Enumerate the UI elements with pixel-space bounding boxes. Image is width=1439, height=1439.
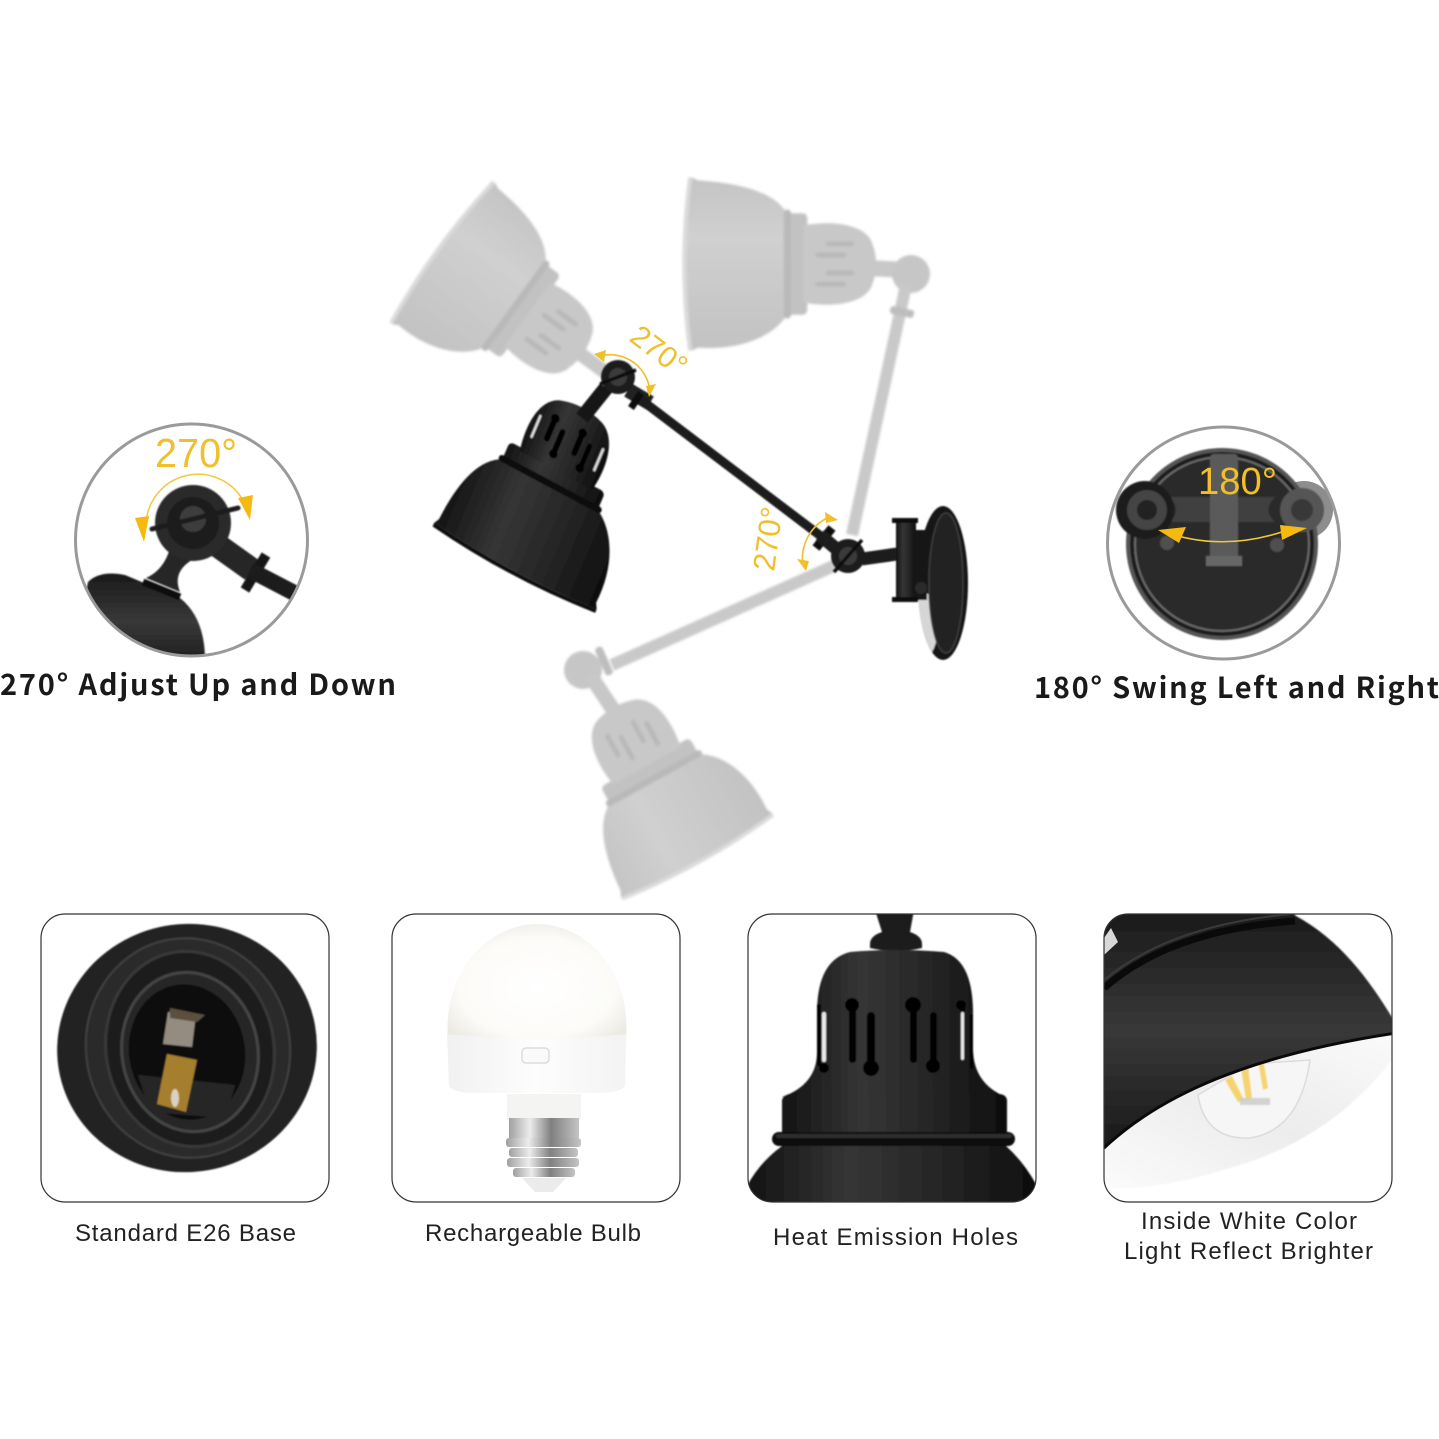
- caption: inside white color: Light Reflect Brighter: [1124, 1238, 1373, 1265]
- card: heat emission holes: [747, 910, 1037, 1204]
- card: inside white color: [1100, 910, 1396, 1202]
- rotation callout: 270 degrees at lower joint: [746, 505, 838, 573]
- socket bell: [782, 950, 1006, 1097]
- detail circle: up and down adjustment: [70, 424, 308, 670]
- shade rim: [1104, 1033, 1396, 1148]
- screw base: [506, 1118, 581, 1192]
- black dome exterior: [1100, 910, 1396, 1152]
- heading: 270 adjust: 270° Adjust Up and Down: [0, 662, 396, 704]
- wall mount: [862, 506, 968, 660]
- brass contact: [157, 1054, 197, 1112]
- wall plate back: [1116, 448, 1324, 640]
- lower joint: [831, 539, 865, 573]
- filaments: [1225, 1058, 1270, 1105]
- bulb band: [447, 1034, 626, 1093]
- joint disc: [155, 485, 231, 561]
- ghost swing end: [1275, 481, 1333, 539]
- arm: [582, 388, 840, 552]
- silver contact: [163, 1012, 196, 1047]
- shade: [747, 1146, 1037, 1204]
- bulb glass: [1198, 1060, 1310, 1138]
- ghost lamp: upper left position: [385, 178, 634, 425]
- caption: standard E26 base: Standard E26 Base: [75, 1220, 296, 1247]
- caption: inside white color: Inside White Color: [1141, 1208, 1357, 1235]
- collar line: [1104, 921, 1295, 988]
- left stem: [146, 548, 192, 592]
- rotation callout: 270 degrees at lower joint: 270°: [746, 505, 790, 573]
- detail circle: left and right swing: 180°: [1198, 461, 1277, 503]
- bulb dome: [447, 924, 627, 1040]
- ghost lamp: upper right position: [682, 178, 930, 535]
- caption: heat emission holes: Heat Emission Holes: [773, 1224, 1018, 1251]
- heading: 180 swing: 180° Swing Left and Right: [1034, 665, 1439, 707]
- main black wall lamp: [431, 360, 968, 660]
- collar: [782, 1094, 1007, 1134]
- bulb neck: [507, 1094, 581, 1120]
- top stem: [870, 910, 922, 951]
- caption: rechargeable bulb: Rechargeable Bulb: [425, 1220, 641, 1247]
- detail circle: left and right swing: [1108, 427, 1340, 659]
- upper joint: [600, 360, 636, 394]
- detail circle: up and down adjustment: 270°: [155, 430, 237, 476]
- lamp dome fragment: [86, 572, 206, 654]
- collar ring: [772, 1132, 1015, 1146]
- highlight corner: [1104, 928, 1118, 955]
- lamp shade and socket: [431, 364, 664, 618]
- ghost lamp: lower position: [539, 564, 838, 905]
- card: rechargeable bulb: [392, 914, 680, 1202]
- caption: inside white color: [1124, 1208, 1373, 1265]
- rotation callout: 270 degrees at upper joint: [594, 319, 693, 397]
- card: standard E26 base: [37, 903, 337, 1202]
- rotation callout: 270 degrees at upper joint: 270°: [624, 319, 693, 383]
- slots: [817, 997, 973, 1076]
- white interior: [1108, 1044, 1386, 1181]
- right arm: [210, 540, 302, 597]
- bulb button: [522, 1048, 549, 1063]
